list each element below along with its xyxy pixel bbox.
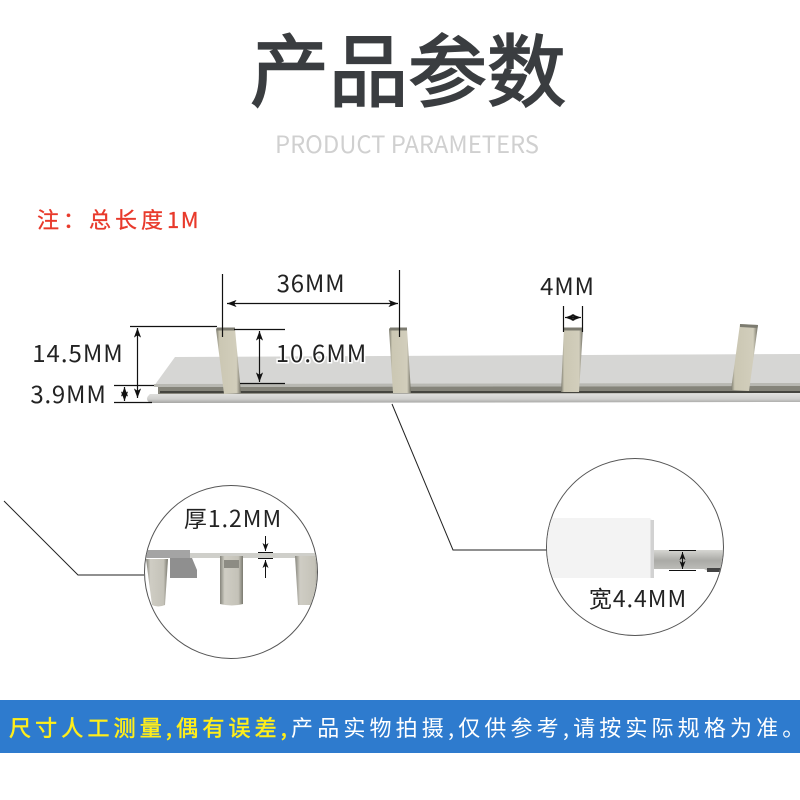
pin 3 <box>561 328 583 392</box>
width arrows <box>669 550 696 570</box>
metal blade <box>653 550 724 571</box>
detail circle: thickness <box>140 486 320 658</box>
clip block <box>170 558 197 578</box>
disclaimer text: 尺寸人工测量,偶有误差,产品实物拍摄,仅供参考,请按实际规格为准。 <box>9 711 800 743</box>
note: total length: 注：总长度1M <box>37 203 200 235</box>
plate edge <box>154 383 800 387</box>
pin 1 <box>216 328 241 394</box>
dimension: 3.9MM <box>30 375 154 410</box>
subtitle: PRODUCT PARAMETERS <box>275 125 539 160</box>
leader line: left detail <box>4 501 144 575</box>
title: 产品参数 <box>250 8 566 123</box>
tab right <box>295 556 317 605</box>
tab middle <box>220 556 243 606</box>
white housing <box>546 518 654 578</box>
product photo: busbar <box>147 324 800 403</box>
thickness arrows <box>258 536 273 578</box>
dimension: 4MM: 4MM <box>540 267 595 302</box>
lower strip <box>147 393 800 403</box>
dimension: 10.6MM: 10.6MM <box>276 334 367 369</box>
thin edge <box>140 553 320 558</box>
width label: 宽4.4MM <box>589 580 687 614</box>
dimension: 4MM <box>540 267 595 332</box>
leader line: right detail <box>392 404 547 550</box>
thickness label: 厚1.2MM <box>184 500 282 534</box>
upper plate <box>154 354 800 386</box>
dimension: 10.6MM <box>234 330 367 384</box>
dimension: 36MM: 36MM <box>277 264 345 299</box>
dimension: 14.5MM: 14.5MM <box>32 334 124 369</box>
pin 2 <box>389 328 411 393</box>
gap between plates <box>158 386 800 395</box>
tab left <box>146 559 168 606</box>
disclaimer banner <box>0 700 800 753</box>
dimension: 3.9MM: 3.9MM <box>30 375 107 410</box>
pin 4 <box>731 324 758 391</box>
detail circle: width <box>546 458 725 636</box>
